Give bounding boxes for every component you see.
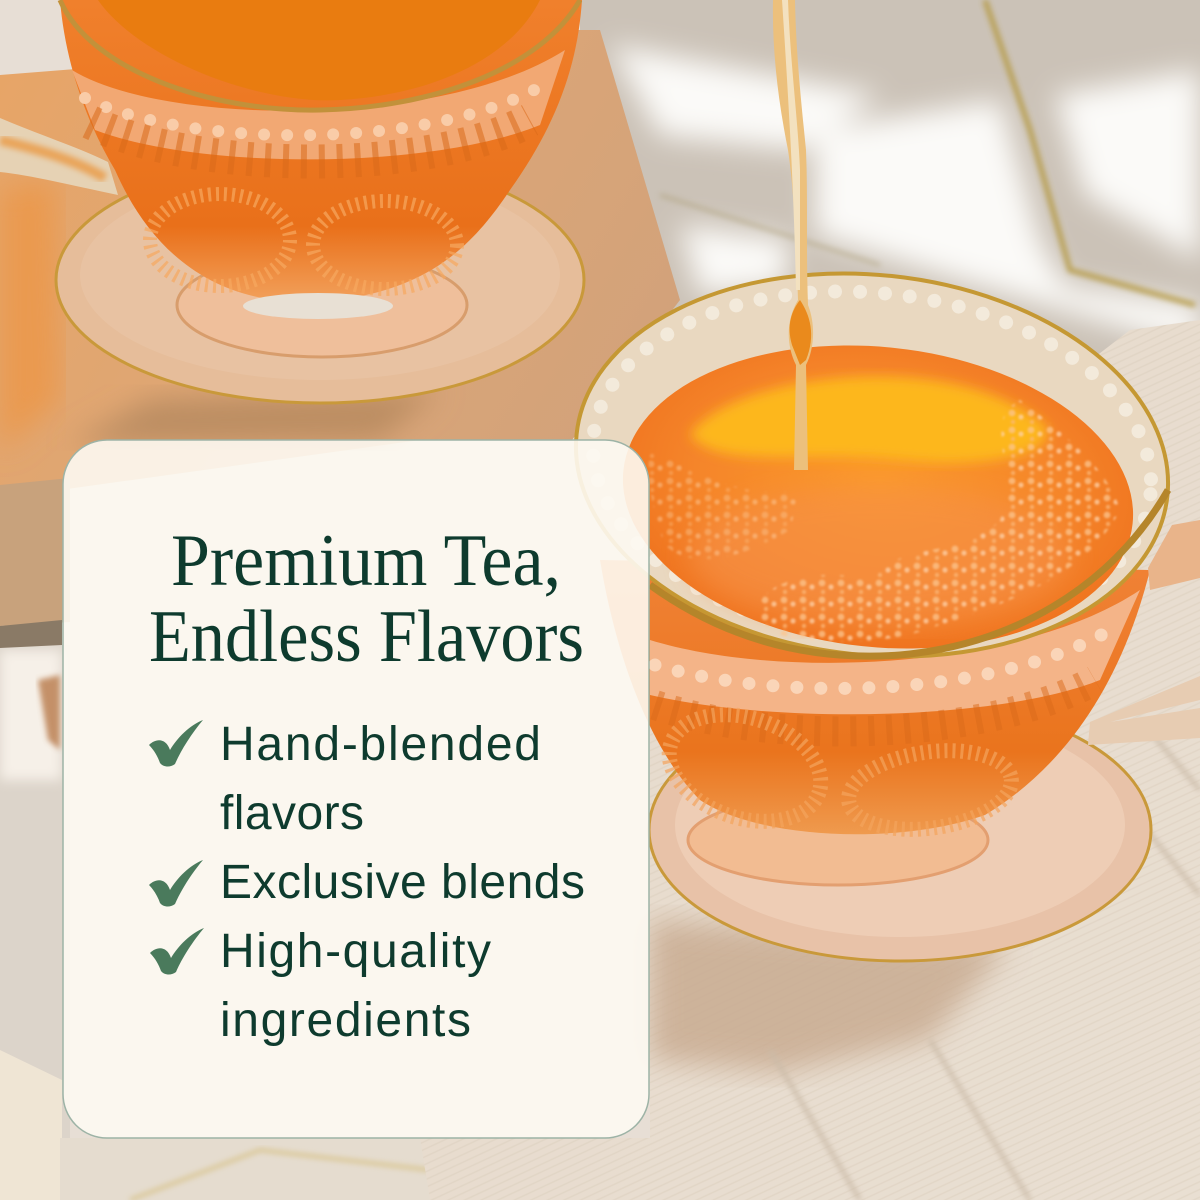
handles xyxy=(1088,676,1200,745)
translucent text panel xyxy=(63,440,649,1138)
tea stream xyxy=(773,0,813,470)
tea surface and gold rim xyxy=(98,0,540,100)
medallions xyxy=(150,194,290,286)
icon: check mark xyxy=(150,928,204,975)
check item: high-quality ingredients: ingredients xyxy=(220,994,471,1047)
heading xyxy=(149,520,584,678)
tea cup: top left with saucer xyxy=(0,0,584,403)
tea cup: main with saucer xyxy=(557,245,1200,961)
gold front rim xyxy=(650,490,1168,656)
checklist xyxy=(149,718,585,1047)
cup body xyxy=(600,560,1150,834)
wooden board xyxy=(0,30,680,648)
glass rim interior xyxy=(557,245,1187,685)
check item: hand-blended flavors: flavors xyxy=(220,787,364,840)
tea surface xyxy=(608,321,1148,673)
handle xyxy=(0,118,118,195)
check item: exclusive blends: Exclusive blends xyxy=(220,856,585,909)
cup body xyxy=(60,0,582,302)
saucer xyxy=(56,157,584,403)
heading: Endless Flavors xyxy=(149,596,584,678)
icon: check mark xyxy=(149,860,203,907)
beaded glass band xyxy=(72,50,565,159)
medallions xyxy=(655,696,835,840)
saucer xyxy=(649,699,1151,961)
check item: hand-blended flavors: Hand-blended xyxy=(220,718,541,771)
heading: Premium Tea, xyxy=(171,520,561,602)
check item: hand-blended flavors xyxy=(149,718,541,840)
beaded glass band xyxy=(650,590,1140,714)
check item: high-quality ingredients: High-quality xyxy=(220,925,491,978)
check item: high-quality ingredients xyxy=(150,925,491,1047)
icon: check mark xyxy=(149,720,203,767)
bubbles xyxy=(649,400,1120,642)
linen cloth xyxy=(420,320,1200,1200)
marble lower left xyxy=(0,645,70,1200)
